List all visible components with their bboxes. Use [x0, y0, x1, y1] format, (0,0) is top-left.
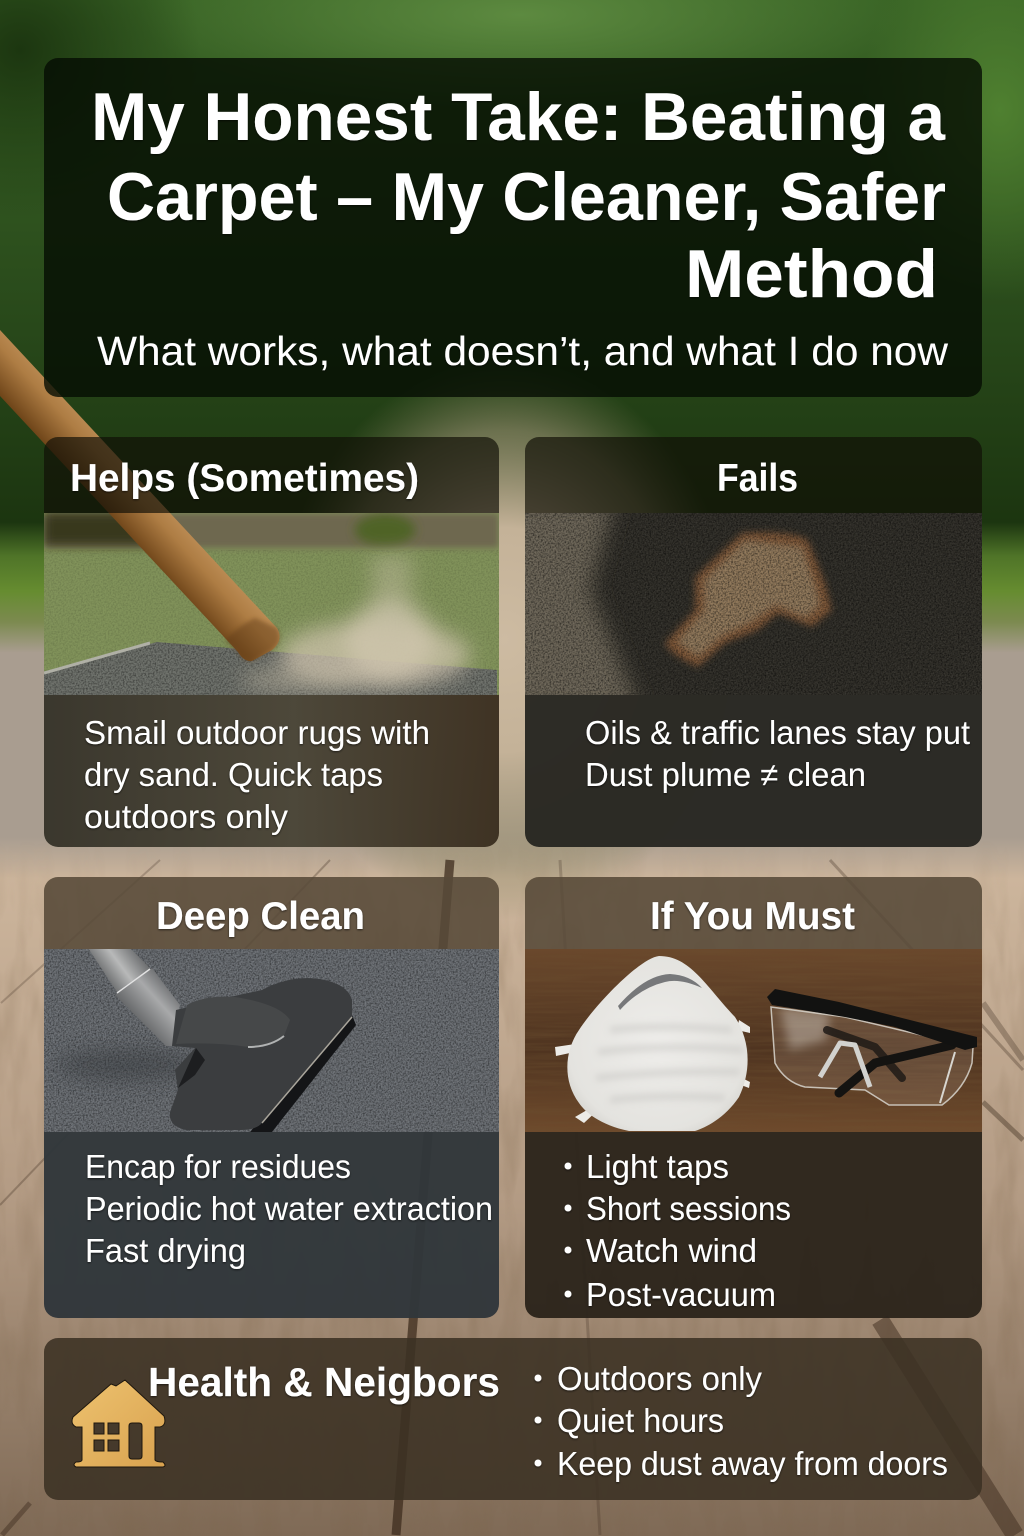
- body text: Encap for residues: [85, 1148, 351, 1185]
- subtitle: What works, what doesn’t, and what I do now: [97, 328, 948, 374]
- header band: [44, 437, 499, 513]
- body text: dry sand. Quick taps: [84, 756, 383, 793]
- body text: Dust plume ≠ clean: [585, 756, 866, 793]
- body list: [534, 1360, 948, 1482]
- icon: dust mask: [555, 956, 750, 1131]
- body list: Watch wind: [586, 1232, 757, 1269]
- body list: Keep dust away from doors: [557, 1445, 948, 1482]
- panel: if you must: [525, 877, 982, 1318]
- text area: [525, 695, 982, 847]
- heading: Deep Clean: [156, 895, 365, 938]
- text area: [44, 695, 499, 847]
- photo: stained carpet: [525, 513, 982, 695]
- body list: Quiet hours: [557, 1402, 724, 1439]
- body text: outdoors only: [84, 798, 289, 835]
- heading: Helps (Sometimes): [70, 457, 419, 500]
- body text: [585, 714, 970, 793]
- body text: Smail outdoor rugs with: [84, 714, 430, 751]
- body list: Outdoors only: [557, 1360, 762, 1397]
- heading: Fails: [717, 457, 798, 500]
- header band: [525, 437, 982, 513]
- icon: safety glasses: [767, 989, 977, 1105]
- body text: Fast drying: [85, 1232, 246, 1269]
- photo: dust mask and safety glasses: [525, 949, 982, 1132]
- body text: Oils & traffic lanes stay put: [585, 714, 970, 751]
- body list: Light taps: [586, 1148, 729, 1185]
- panel: helps sometimes: [44, 437, 499, 847]
- panel: fails: [505, 437, 982, 847]
- photo: dust from outdoor rug: [44, 513, 499, 695]
- body text: Periodic hot water extraction: [85, 1190, 493, 1227]
- body text: [84, 714, 430, 835]
- body list: Post-vacuum: [586, 1276, 776, 1313]
- panel: health and neighbors: [44, 1338, 982, 1500]
- panel: title: [44, 58, 982, 397]
- body text: [85, 1148, 493, 1269]
- heading: title line 3: Method: [685, 236, 938, 312]
- heading: Health & Neigbors: [148, 1359, 500, 1405]
- text area: [44, 1132, 499, 1318]
- body list: Short sessions: [586, 1190, 791, 1227]
- header band: [44, 877, 499, 949]
- panel: deep clean: [44, 877, 499, 1318]
- text area: [525, 1132, 982, 1318]
- body list: [564, 1148, 791, 1313]
- heading: If You Must: [650, 895, 855, 938]
- icon: wooden carpet beater handle behind panels: [0, 330, 280, 661]
- heading: title line 2: Carpet – My Cleaner, Safer: [107, 159, 946, 235]
- header band: [525, 877, 982, 949]
- heading: title line 1: My Honest Take: Beating a: [91, 79, 946, 155]
- photo: vacuum nozzle on carpet: [44, 948, 499, 1132]
- icon: house: [72, 1380, 165, 1467]
